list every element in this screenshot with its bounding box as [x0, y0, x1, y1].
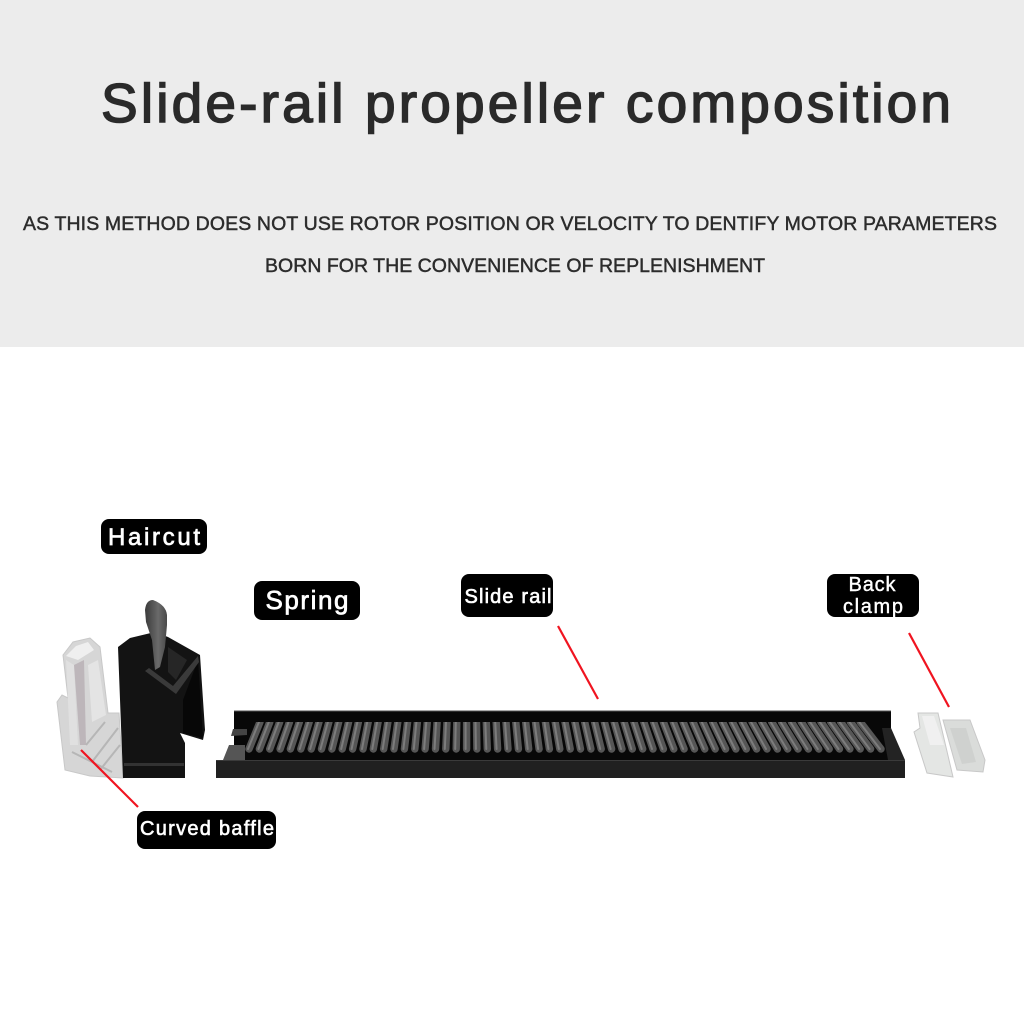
label: Slide rail: Slide rail: [464, 586, 552, 608]
header panel: [0, 0, 1024, 347]
label: Back clamp: [827, 574, 919, 618]
part: curved baffle (clear): [57, 638, 123, 778]
part: haircut pusher (black): [118, 600, 205, 778]
part: back clamp (clear): [914, 713, 985, 777]
label: Back clamp: Back: [848, 574, 896, 596]
arrow: back clamp: [909, 633, 949, 707]
arrow: curved baffle: [81, 750, 138, 807]
part: slide rail: [216, 711, 905, 778]
label: Haircut: [101, 519, 207, 554]
label: Haircut: Haircut: [108, 524, 200, 551]
spring ribs: [248, 722, 881, 749]
label: Curved baffle: [137, 811, 276, 849]
label: Slide rail: [461, 574, 553, 617]
arrow: slide rail: [558, 626, 598, 699]
subtitle line 1: AS THIS METHOD DOES NOT USE ROTOR POSITION OR VELOCITY TO DENTIFY MOTOR PARAMETERS: [23, 213, 997, 235]
label: Curved baffle: Curved baffle: [140, 818, 274, 840]
curved blade: [145, 600, 167, 670]
label: Back clamp: clamp: [843, 596, 903, 618]
label: Spring: [254, 581, 360, 620]
subtitle line 2: BORN FOR THE CONVENIENCE OF REPLENISHMENT: [265, 255, 765, 277]
label: Spring: Spring: [266, 585, 348, 615]
title: Slide-rail propeller composition: [101, 72, 951, 134]
